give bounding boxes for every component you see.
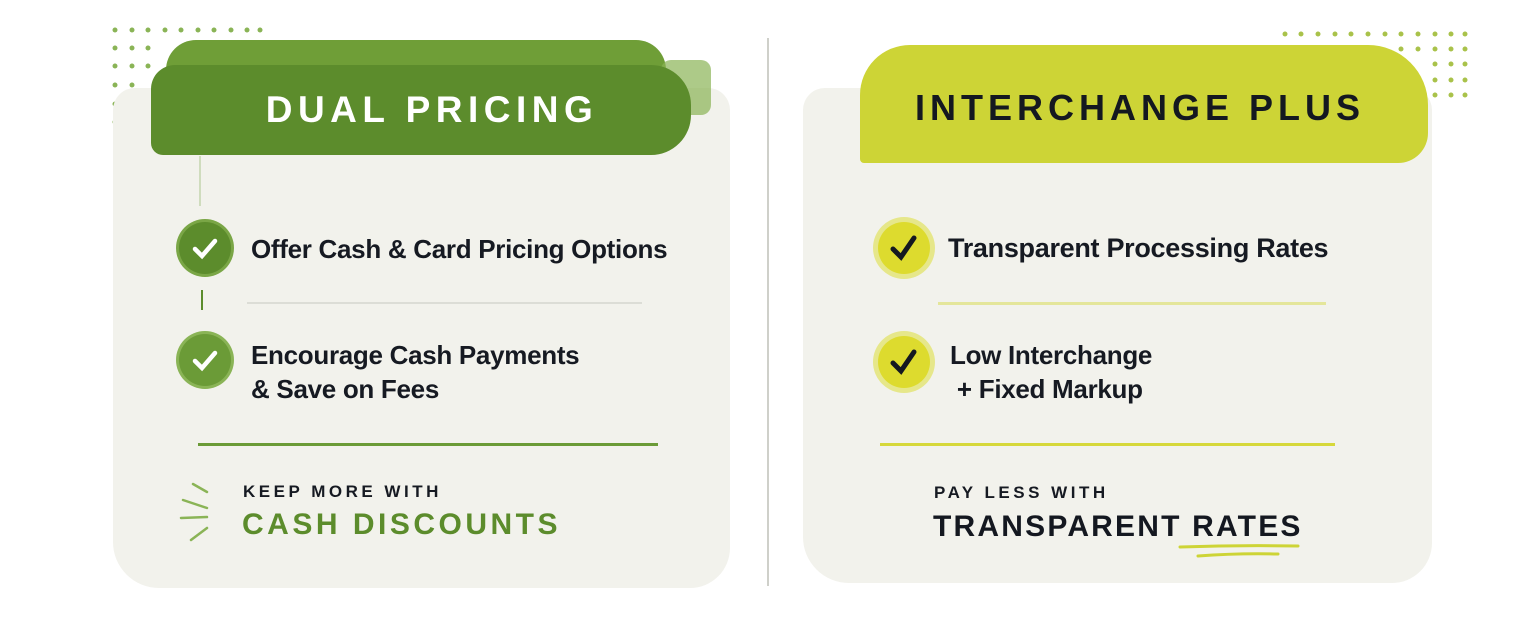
title: INTERCHANGE PLUS [915, 87, 1365, 128]
item 2 [176, 331, 579, 404]
item 2 [873, 331, 1152, 404]
item 1 [176, 219, 667, 277]
dots: right [1282, 32, 1468, 98]
item 2: Low Interchange [950, 340, 1152, 370]
dots: left [112, 28, 262, 124]
icon: check [878, 222, 930, 274]
callout: cash discounts [180, 482, 561, 542]
icon: check [179, 334, 231, 386]
icon: check [179, 222, 231, 274]
item 2: Encourage Cash Payments [251, 340, 579, 370]
icon: check [878, 336, 930, 388]
panel: interchange plus [803, 88, 1432, 583]
item 1 [873, 217, 1328, 279]
callout: cash discounts: CASH DISCOUNTS [242, 508, 561, 541]
panel: dual pricing [113, 88, 730, 588]
header: dual pricing [151, 40, 711, 155]
item 1: Transparent Processing Rates [948, 233, 1328, 263]
callout: transparent rates: PAY LESS WITH [934, 483, 1109, 502]
header: interchange plus [860, 45, 1428, 163]
item 1: Offer Cash & Card Pricing Options [251, 234, 667, 264]
title: DUAL PRICING [266, 89, 598, 130]
callout: cash discounts: KEEP MORE WITH [243, 482, 442, 501]
callout: transparent rates: TRANSPARENT RATES [933, 510, 1303, 543]
item 2: & Save on Fees [251, 374, 439, 404]
item 2: + Fixed Markup [957, 374, 1143, 404]
callout: transparent rates [933, 483, 1303, 558]
